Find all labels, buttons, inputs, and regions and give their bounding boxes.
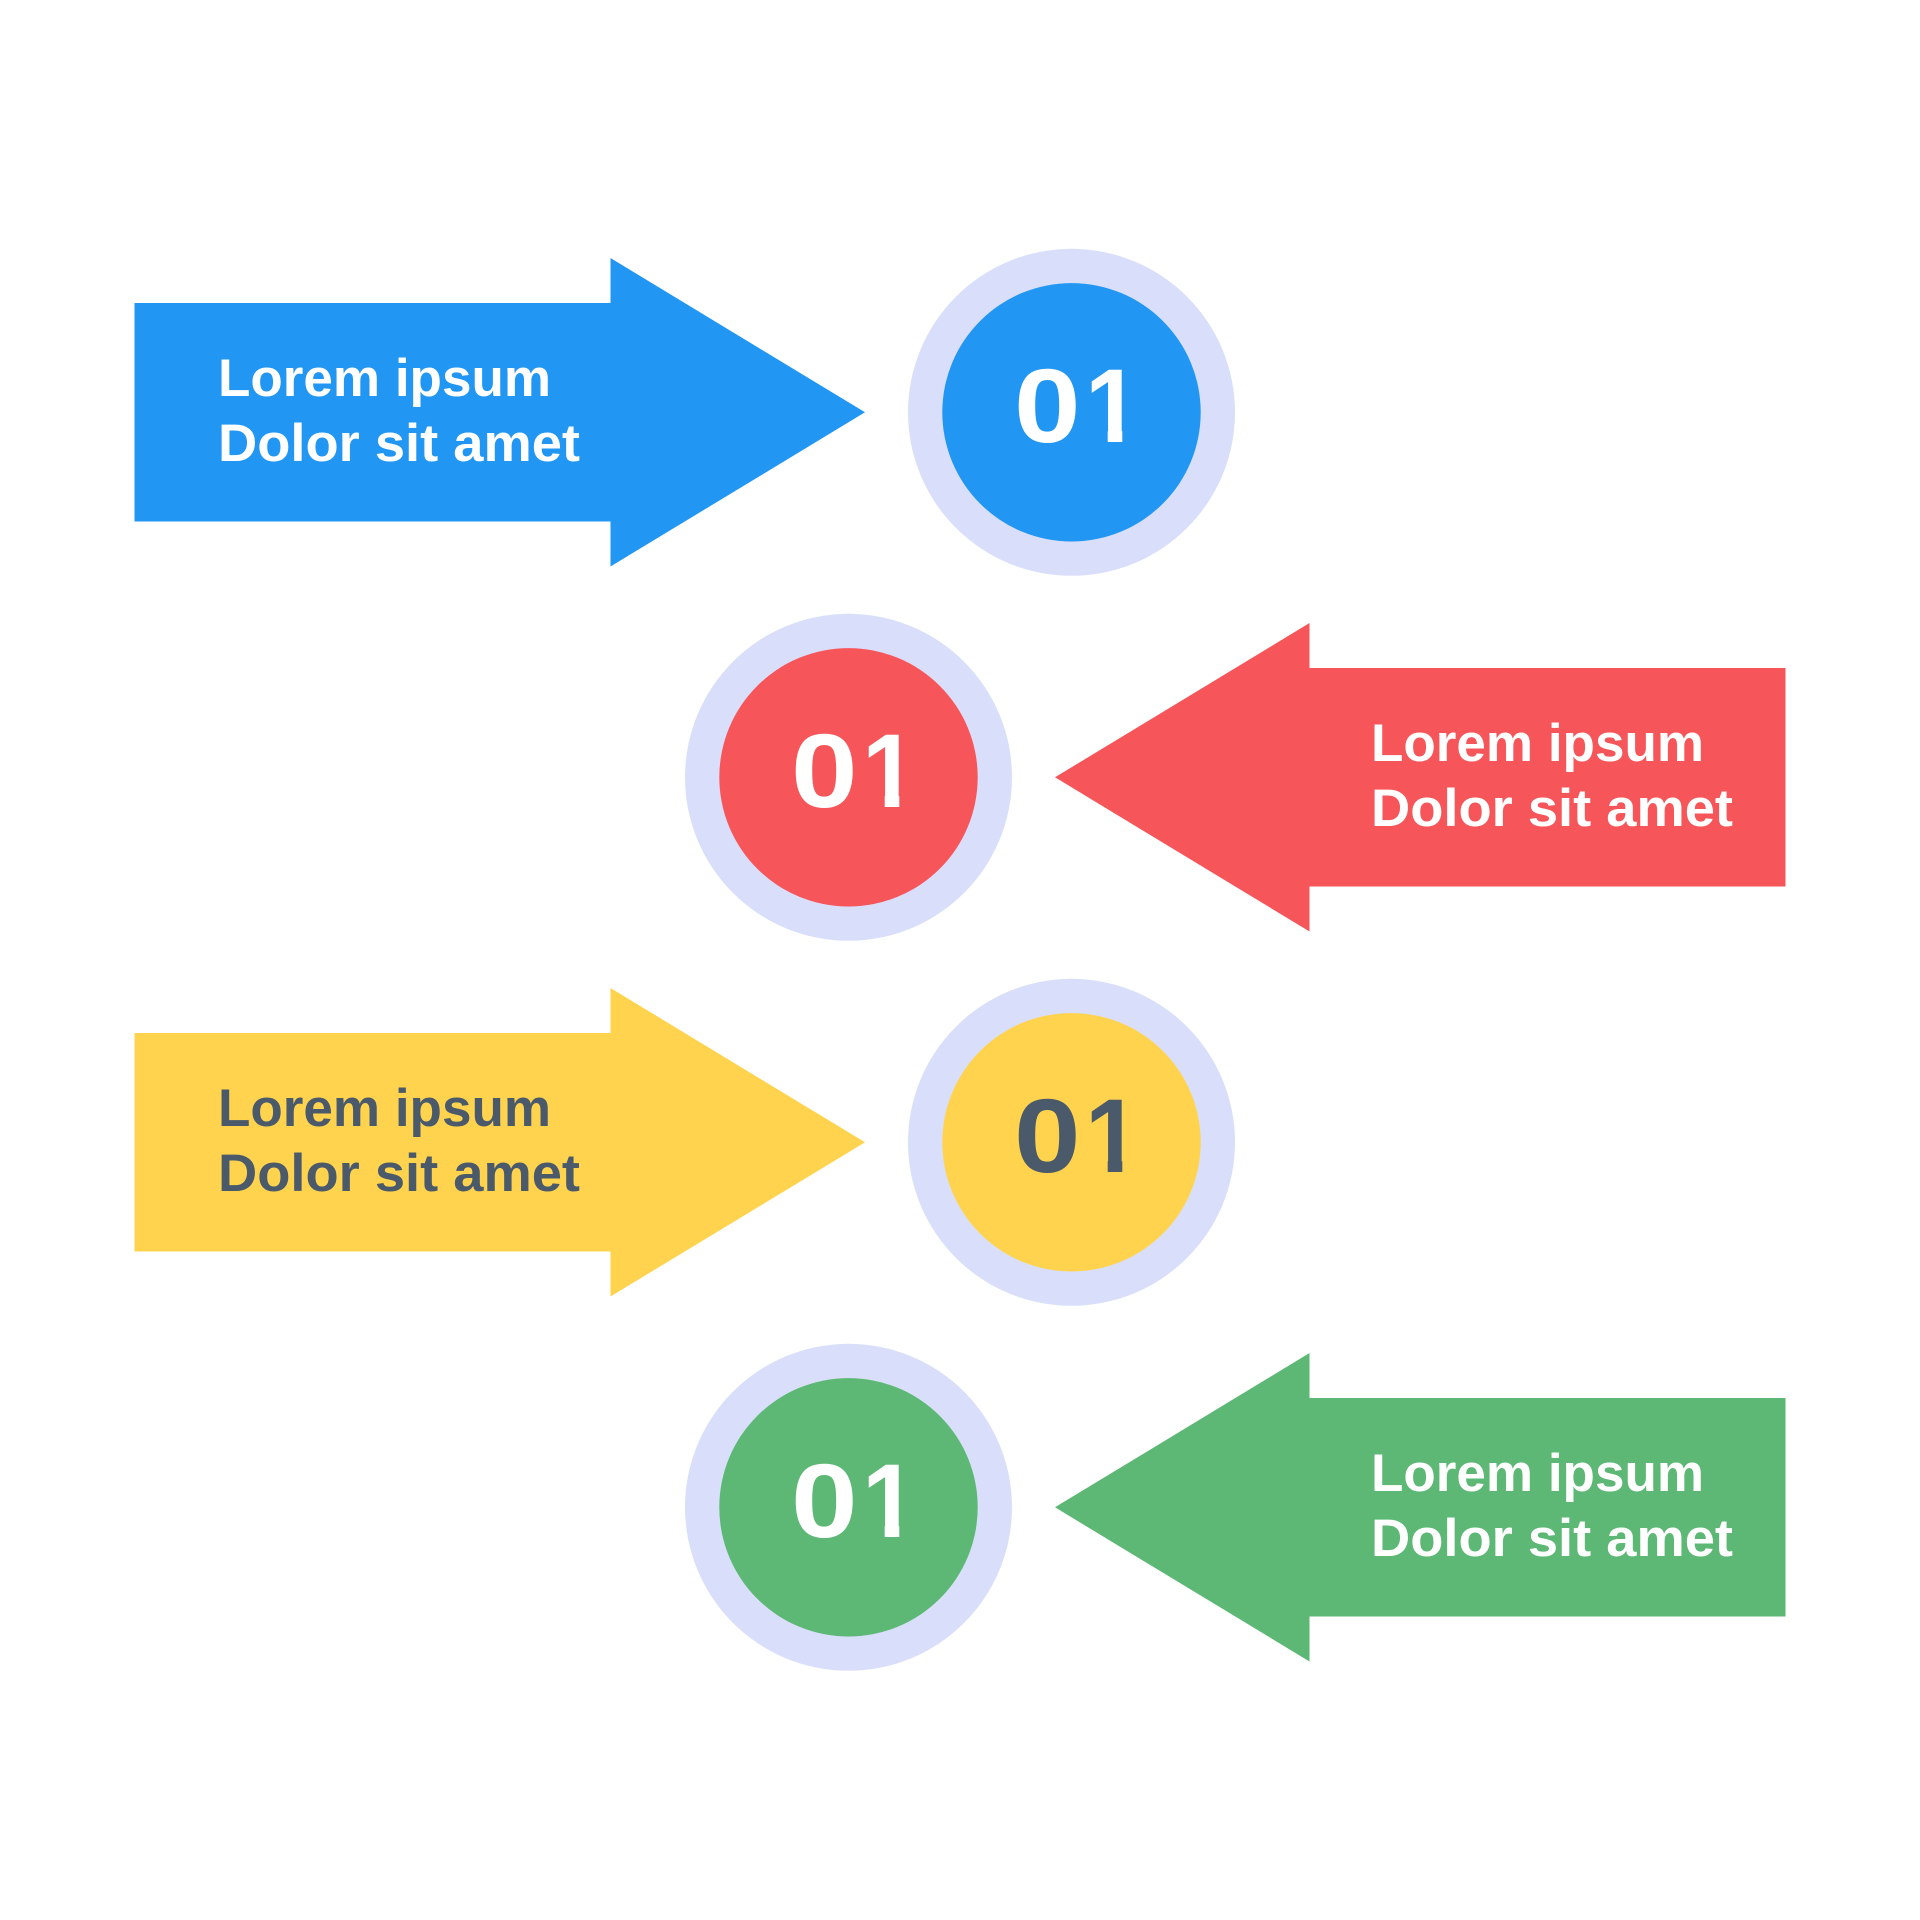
text block: yellow arrow label: Lorem ipsum xyxy=(218,1079,551,1138)
text block: red arrow label xyxy=(1371,714,1733,838)
badge: blue number circle: 1 xyxy=(1085,348,1140,465)
badge: green number circle xyxy=(685,1344,1012,1671)
badge: red number circle: 1 xyxy=(862,713,917,830)
text block: blue arrow label: Lorem ipsum xyxy=(218,349,551,408)
badge: blue number circle: 0 xyxy=(1014,348,1081,465)
badge: yellow number circle xyxy=(908,979,1235,1306)
text block: green arrow label xyxy=(1371,1444,1733,1568)
badge: green number circle: 0 xyxy=(791,1443,858,1560)
text block: red arrow label: Dolor sit amet xyxy=(1371,779,1733,838)
badge: red number circle xyxy=(685,614,1012,941)
badge: red number circle: 0 xyxy=(791,713,858,830)
text block: yellow arrow label: Dolor sit amet xyxy=(218,1144,580,1203)
badge: yellow number circle: 1 xyxy=(1085,1078,1140,1195)
arrow: blue, pointing right xyxy=(134,258,865,566)
arrow: yellow, pointing right xyxy=(134,988,865,1296)
text block: green arrow label: Lorem ipsum xyxy=(1371,1444,1704,1503)
badge: green number circle: 1 xyxy=(862,1443,917,1560)
text block: red arrow label: Lorem ipsum xyxy=(1371,714,1704,773)
row 3: yellow arrow and badge xyxy=(134,979,1235,1306)
text block: blue arrow label: Dolor sit amet xyxy=(218,414,580,473)
badge: yellow number circle: 0 xyxy=(1014,1078,1081,1195)
badge: blue number circle xyxy=(908,249,1235,576)
row 4: green arrow and badge xyxy=(685,1344,1786,1671)
text block: blue arrow label xyxy=(218,349,580,473)
row 1: blue arrow and badge xyxy=(134,249,1235,576)
row 2: red arrow and badge xyxy=(685,614,1786,941)
text block: green arrow label: Dolor sit amet xyxy=(1371,1509,1733,1568)
arrow: green, pointing left xyxy=(1055,1353,1786,1662)
arrow: red, pointing left xyxy=(1055,623,1786,932)
text block: yellow arrow label xyxy=(218,1079,580,1203)
